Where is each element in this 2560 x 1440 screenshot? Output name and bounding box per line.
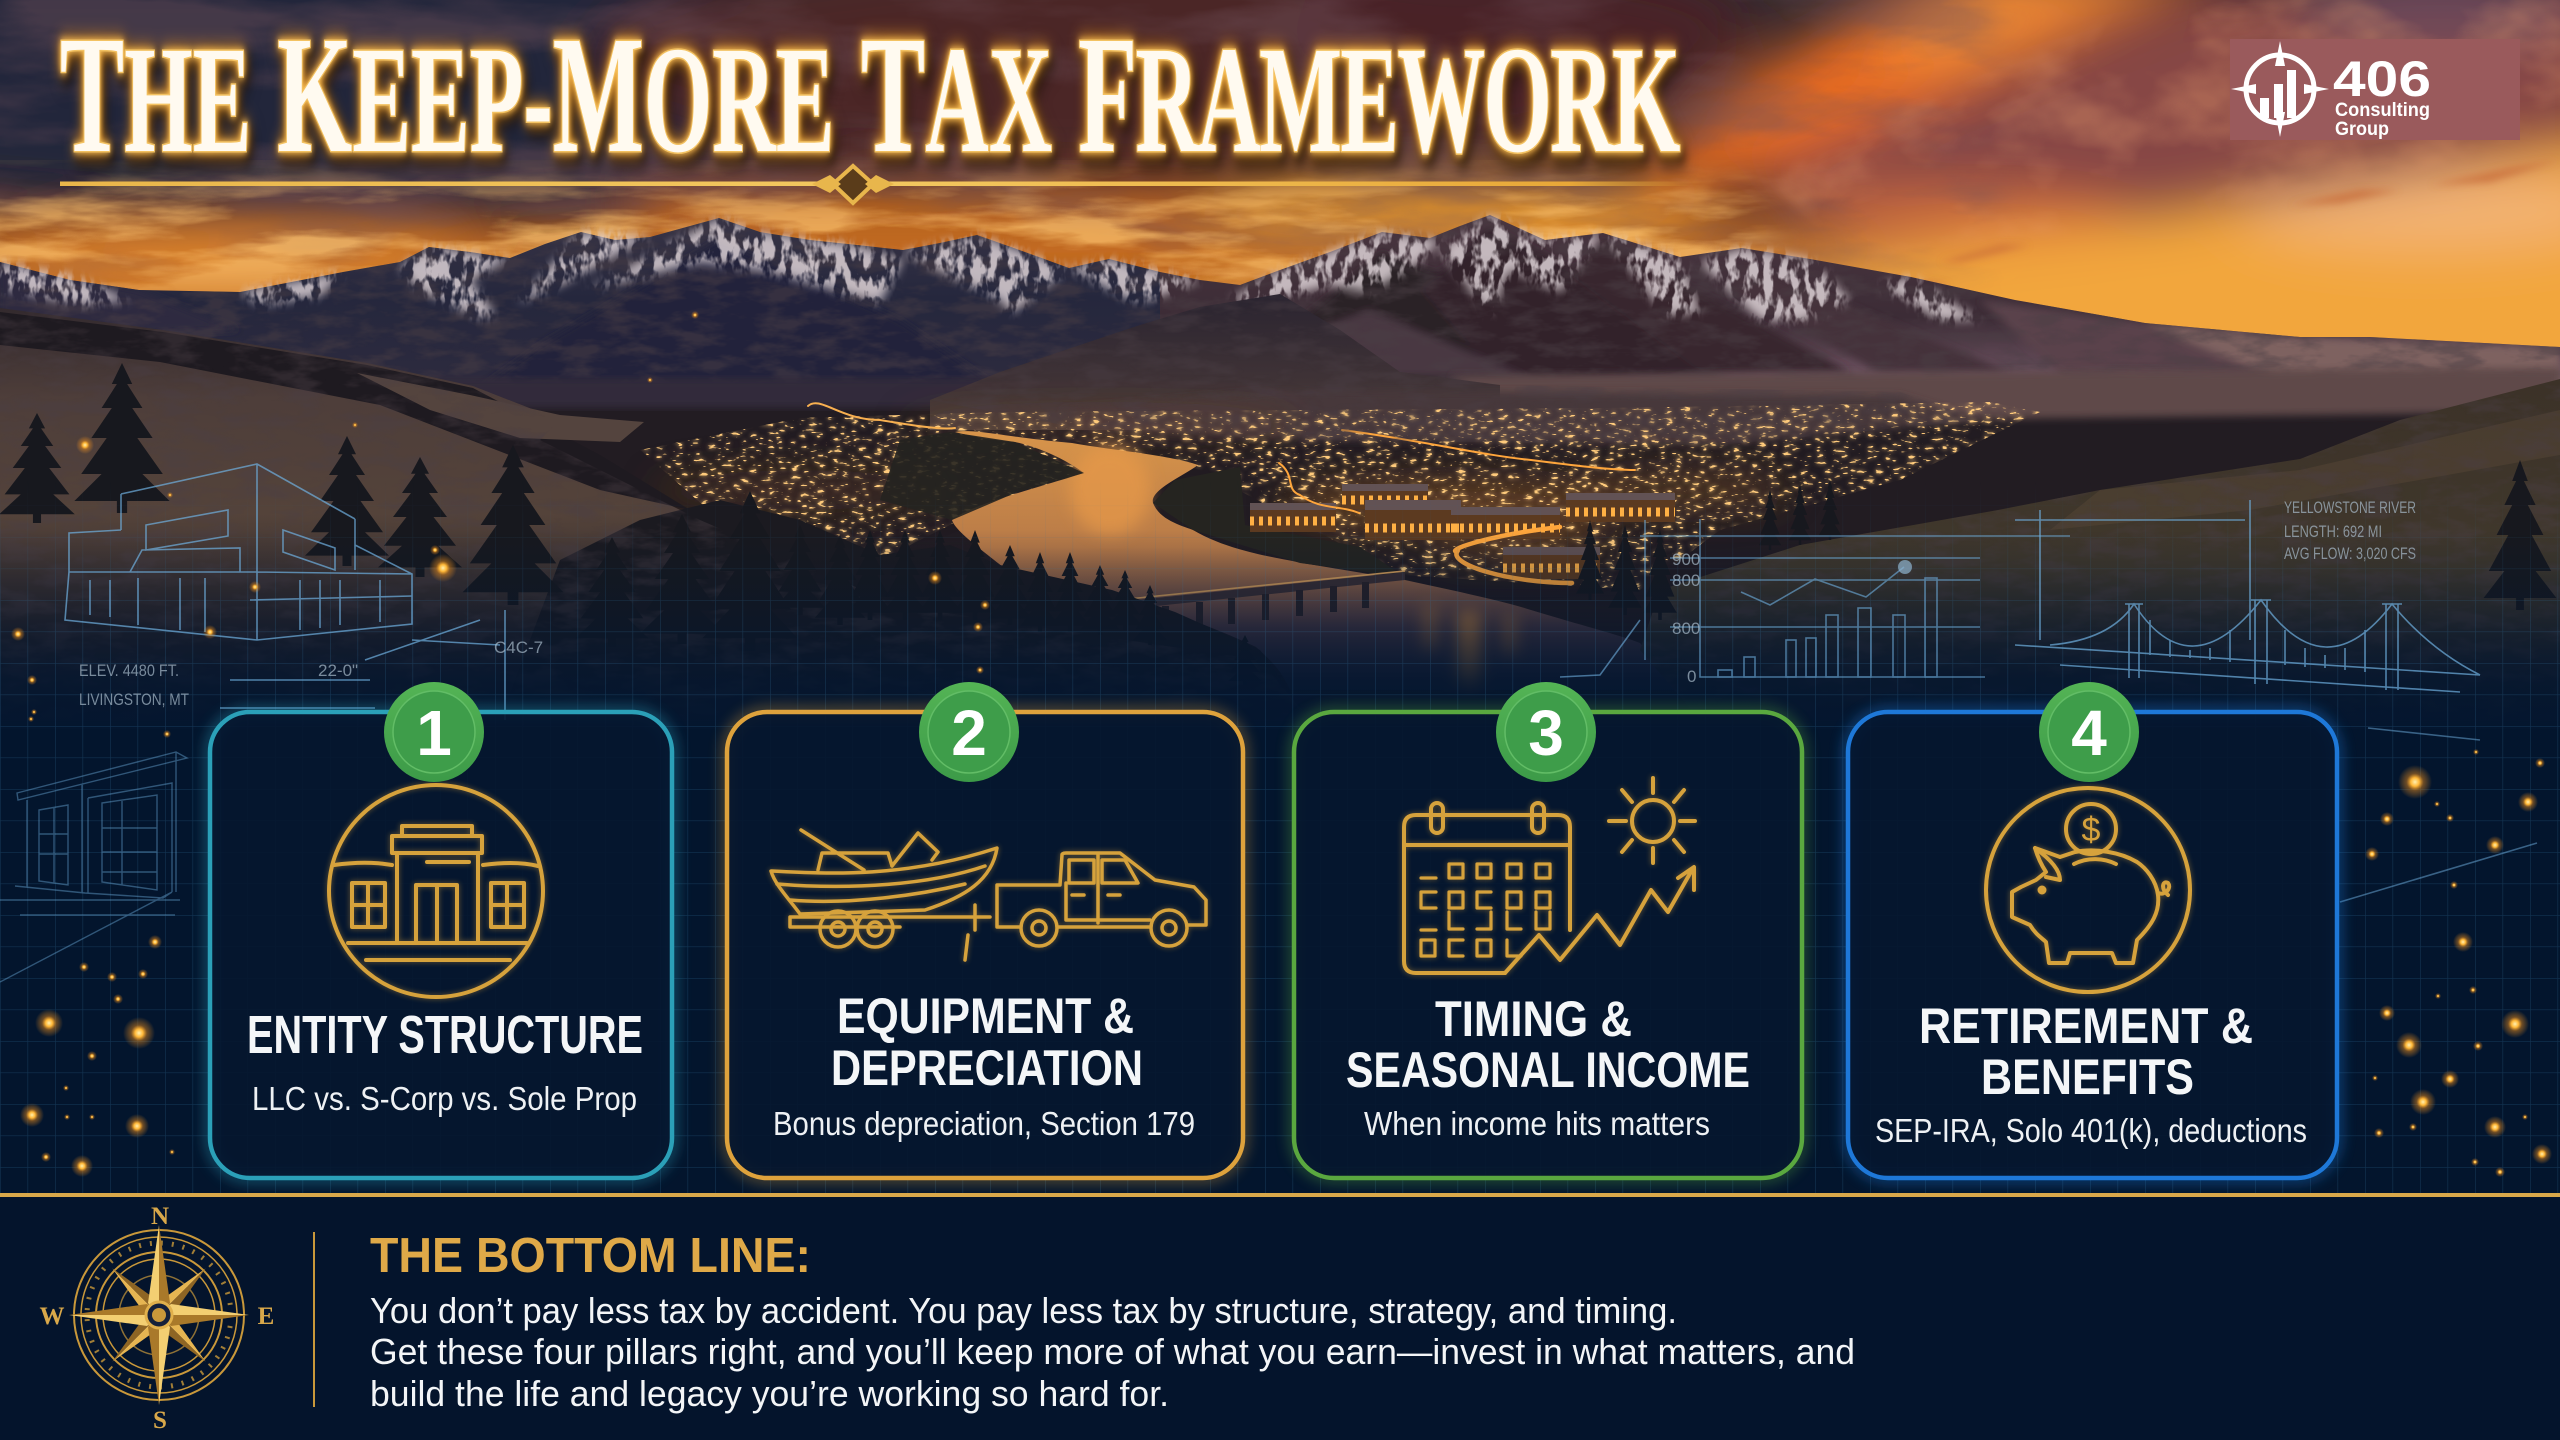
title: HE [124, 15, 251, 184]
blueprint: sketch lines at right [2340, 728, 2537, 902]
blueprint label: location: LIVINGSTON, MT [79, 690, 189, 709]
blueprint: bar and line chart: 800 [1672, 571, 1700, 590]
logo: 406 Consulting Group: Consulting [2335, 100, 2430, 121]
icon: piggy bank with coin: $ [2082, 811, 2101, 849]
panel: retirement and benefits: RETIREMENT & [1919, 998, 2253, 1054]
background: valley floor and city [484, 294, 2560, 656]
title: T [60, 1, 124, 188]
text: bottom line body: Get these four pillars right, and you’ll keep more of what you earn—invest in what matters, and [370, 1331, 1855, 1372]
cloud texture [0, 0, 2014, 279]
badge: number 2 [919, 682, 1019, 782]
blueprint label: elevation: ELEV. 4480 FT. [79, 661, 179, 680]
road lights [808, 403, 1635, 583]
title: T [861, 1, 925, 188]
blueprint: suspension bridge [2015, 500, 2480, 692]
blueprint: river notes: YELLOWSTONE RIVER [2284, 498, 2416, 517]
bottom band [0, 1193, 2560, 1440]
background: sunset sky [0, 0, 2560, 347]
icon: compass rose [40, 1203, 274, 1434]
blueprint: river notes: AVG FLOW: 3,020 CFS [2284, 544, 2416, 563]
panel: retirement and benefits [1848, 712, 2337, 1178]
text: bottom line body [370, 1290, 1855, 1414]
blueprint: bar and line chart: 900 [1672, 550, 1700, 569]
badge: number 4: 4 [2071, 697, 2107, 769]
icon: calendar, sun and rising arrow [1404, 778, 1695, 973]
heading: the bottom line: THE BOTTOM LINE: [370, 1229, 811, 1283]
ember sparkles [11, 311, 2552, 1177]
panel: equipment and depreciation: Bonus depreciation, Section 179 [773, 1105, 1195, 1142]
logo: 406 Consulting Group: 406 [2333, 51, 2431, 107]
blueprint: river notes: LENGTH: 692 MI [2284, 522, 2382, 541]
title: RAMEWORK [1135, 15, 1680, 184]
highway bridge [1118, 571, 1405, 632]
blueprint: faint second building [0, 752, 187, 982]
blueprint: bar and line chart: 800 [1672, 619, 1700, 638]
panel: equipment and depreciation: DEPRECIATION [831, 1040, 1143, 1096]
river and lake [952, 431, 1680, 690]
badge: number 3 [1496, 682, 1596, 782]
logo: 406 Consulting Group: Group [2335, 119, 2389, 140]
divider [313, 1232, 315, 1407]
panel: equipment and depreciation: EQUIPMENT & [837, 988, 1134, 1044]
title: F [1078, 1, 1135, 188]
icon: piggy bank with coin [1986, 788, 2190, 992]
panel: timing and seasonal income: When income hits matters [1364, 1105, 1710, 1142]
background: mountain ranges [0, 210, 2560, 384]
blueprint grid [0, 480, 2560, 1200]
badge: number 3: 3 [1528, 697, 1564, 769]
icon: compass with bars [2231, 41, 2329, 137]
panel: timing and seasonal income [1294, 712, 1802, 1178]
panel: timing and seasonal income: SEASONAL INCOME [1346, 1042, 1750, 1098]
panel: entity structure: ENTITY STRUCTURE [247, 1005, 643, 1065]
badge: number 2: 2 [951, 697, 987, 769]
panel: equipment and depreciation [727, 712, 1243, 1178]
left and right hillsides with pines [0, 302, 2560, 651]
background: navy fade into blueprint [0, 530, 2560, 730]
panel: retirement and benefits: BENEFITS [1981, 1049, 2194, 1105]
badge: number 1 [384, 682, 484, 782]
blueprint: building sketch [65, 464, 505, 720]
title: EEP-MORE [352, 1, 834, 188]
title [60, 1, 1680, 188]
text: bottom line body: build the life and legacy you’re working so hard for. [370, 1373, 1169, 1414]
icon: boat on trailer towed by truck [771, 830, 1206, 960]
icon: compass rose: S [153, 1407, 167, 1434]
town buildings with lit facades [1250, 484, 1675, 579]
badge: number 1: 1 [416, 697, 452, 769]
title: AX [925, 15, 1052, 184]
forest between river and town [880, 432, 1405, 577]
blueprint: river notes [2284, 498, 2416, 563]
panel: entity structure: LLC vs. S-Corp vs. Sole Prop [252, 1080, 637, 1117]
icon: compass rose: E [258, 1303, 274, 1330]
blueprint: bar and line chart: 0 [1687, 667, 1696, 686]
panel: timing and seasonal income: TIMING & [1435, 991, 1632, 1047]
blueprint label: section: C4C-7 [494, 638, 543, 657]
title: K [277, 1, 352, 188]
icon: compass rose: N [151, 1203, 169, 1230]
panel: retirement and benefits: SEP-IRA, Solo 401(k), deductions [1875, 1112, 2307, 1149]
logo: 406 Consulting Group [2230, 39, 2520, 140]
title underline with diamond ornament [60, 166, 1700, 203]
snow streaks [0, 210, 1974, 328]
badge: number 4 [2039, 682, 2139, 782]
icon: office building in circle [329, 785, 543, 997]
icon: compass rose: W [40, 1303, 64, 1330]
blueprint label: dimension: 22-0" [318, 661, 358, 680]
text: bottom line body: You don’t pay less tax by accident. You pay less tax by structure, strategy, and timing. [370, 1290, 1677, 1331]
panel: entity structure [210, 712, 672, 1178]
blueprint: bar and line chart [1560, 519, 2070, 686]
